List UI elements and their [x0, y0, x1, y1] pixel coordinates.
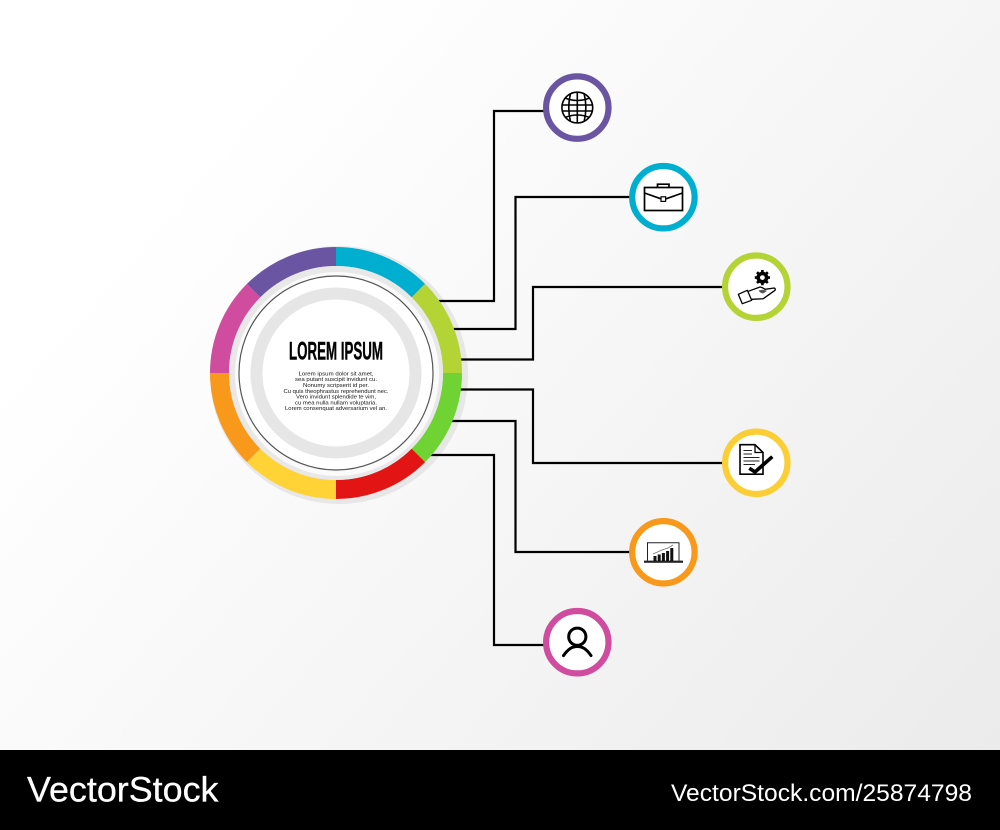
body text: Cu quis theophrastus reprehendunt nec.	[284, 389, 389, 395]
main colour ring	[210, 247, 462, 499]
connector: magenta	[425, 455, 546, 645]
icon: globe	[562, 92, 593, 123]
body text	[284, 372, 389, 412]
footer bar	[0, 750, 1000, 830]
node: hand with gear	[725, 256, 788, 318]
ring shadow	[210, 246, 468, 504]
connector: blue	[445, 197, 632, 329]
segment: magenta	[210, 284, 260, 373]
connector: orange	[445, 421, 632, 552]
node: person	[546, 611, 608, 673]
segment: lime	[412, 284, 462, 373]
body text: cu mea nulla nullam voluptaria.	[295, 400, 377, 406]
connector: yellow	[450, 390, 724, 463]
body text: sea putant suscipit invidunt cu.	[295, 377, 377, 383]
central disc	[229, 266, 443, 480]
segment: green	[412, 373, 462, 462]
icon: person	[564, 628, 591, 656]
node: globe	[546, 76, 608, 139]
segment: orange	[210, 373, 260, 462]
segment: blue	[336, 247, 425, 297]
connector: purple	[430, 111, 546, 301]
connector lines	[425, 111, 724, 645]
node: laptop chart	[632, 521, 695, 584]
segment: purple	[247, 247, 336, 297]
node: briefcase	[632, 166, 695, 228]
icon: hand and gear	[738, 270, 775, 304]
node: document check	[725, 432, 788, 494]
footer url: VectorStock.com/25874798	[671, 781, 972, 807]
icon: briefcase	[644, 184, 682, 210]
body text: Lorem ipsum dolor sit amet,	[298, 372, 374, 378]
icon: document with checkmark	[740, 445, 772, 474]
body text: Lorem consenquat adversarium vel an.	[285, 406, 387, 412]
icon: laptop with bar chart	[644, 543, 683, 563]
heading: LOREM IPSUM	[289, 338, 383, 366]
connector: lime	[450, 287, 724, 360]
segment: red	[336, 449, 425, 499]
footer logo: VectorStock	[27, 770, 219, 810]
body text: Vero invidunt splendide te vim,	[296, 395, 376, 401]
segment: yellow	[247, 449, 336, 499]
body text: Nonumy scripserit id per.	[303, 383, 369, 389]
